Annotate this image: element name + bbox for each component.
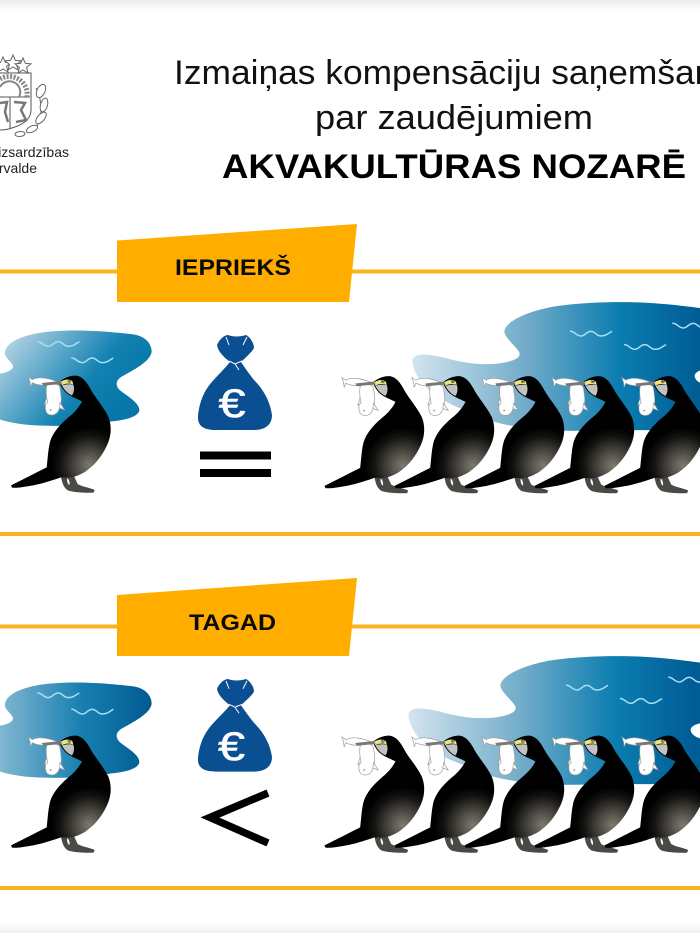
title: AKVAKULTŪRAS NOZARĒ [222, 148, 686, 186]
logo text [0, 144, 69, 176]
water: small pond [0, 682, 152, 778]
water: large lake [408, 656, 700, 785]
icon: coat of arms [0, 55, 49, 137]
title [174, 54, 700, 186]
icon: money bag with euro [198, 679, 272, 772]
less-than sign [210, 793, 268, 843]
panel: now [0, 578, 700, 853]
icon: cormorant with fish [11, 376, 111, 493]
icon: money bag with euro: € [218, 725, 245, 769]
icon: money bag with euro: € [218, 382, 246, 426]
heading label: TAGAD [117, 578, 357, 656]
water: large lake [412, 302, 700, 431]
panel: before [0, 224, 700, 493]
heading label: IEPRIEKŠ: IEPRIEKŠ [175, 255, 291, 280]
icon: money bag with euro [198, 335, 272, 430]
icons: five cormorants with fish [324, 736, 700, 853]
title: Izmaiņas kompensāciju saņemšanā [174, 54, 700, 92]
title: par zaudējumiem [315, 99, 593, 137]
icons: five cormorants with fish [324, 376, 700, 493]
heading label: TAGAD: TAGAD [189, 610, 276, 635]
logo: coat of arms and organisation name [0, 55, 69, 176]
water: small pond [0, 330, 152, 426]
heading label: IEPRIEKŠ [117, 224, 357, 302]
equals sign [200, 452, 271, 477]
icon: cormorant with fish [11, 736, 111, 853]
